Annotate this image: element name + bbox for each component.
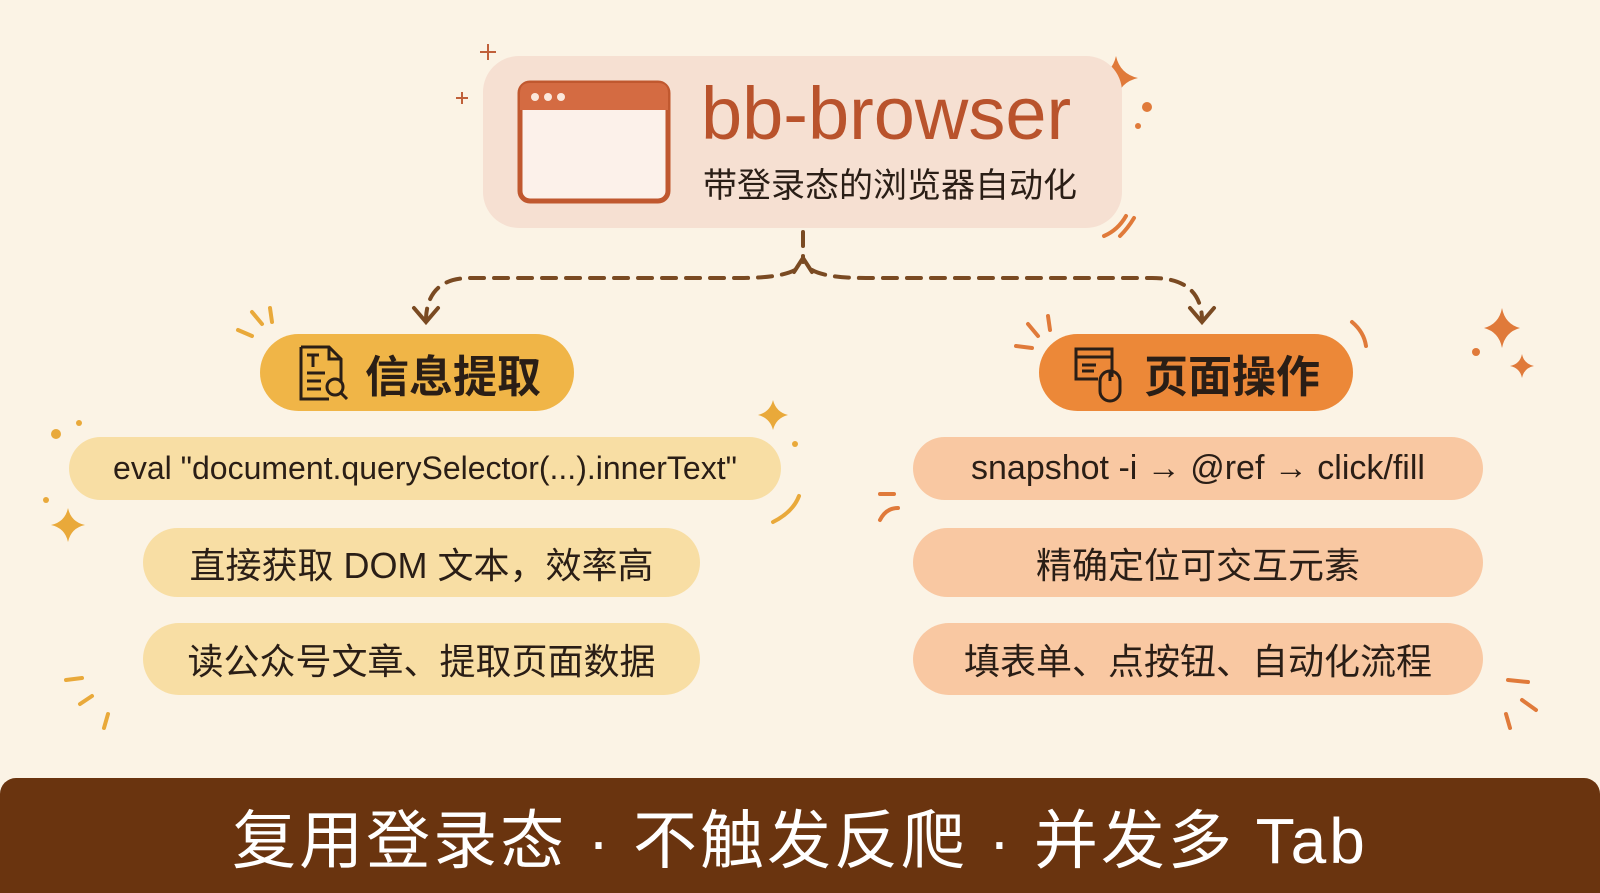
right row 3 — [913, 623, 1483, 695]
bottom banner — [0, 778, 1600, 893]
icon: document search — [300, 346, 348, 400]
left row 2: 直接获取 DOM 文本，效率高 — [190, 544, 654, 586]
bottom banner: 复用登录态 · 不触发反爬 · 并发多 Tab — [232, 804, 1368, 876]
left row 3: 读公众号文章、提取页面数据 — [187, 641, 656, 682]
left row 1: eval "document.querySelector(...).innerText" — [113, 450, 737, 486]
left row 3 — [143, 623, 700, 695]
right row 2 — [913, 528, 1483, 597]
pill: 信息提取: 信息提取 — [365, 352, 541, 402]
right row 2: 精确定位可交互元素 — [1036, 544, 1360, 586]
pill: 信息提取 — [260, 334, 574, 411]
icon: window with mouse — [1074, 348, 1122, 402]
left row 2 — [143, 528, 700, 597]
pill: 页面操作 — [1039, 334, 1353, 411]
pill: 页面操作: 页面操作 — [1144, 352, 1320, 402]
header box — [483, 56, 1122, 228]
left row 1 — [69, 437, 781, 500]
title: bb-browser — [701, 72, 1071, 155]
right row 1 — [913, 437, 1483, 500]
right row 3: 填表单、点按钮、自动化流程 — [964, 641, 1432, 682]
icon: browser window — [518, 80, 670, 204]
right row 1: snapshot -i → @ref → click/fill — [971, 449, 1425, 487]
subtitle: 带登录态的浏览器自动化 — [703, 167, 1077, 205]
